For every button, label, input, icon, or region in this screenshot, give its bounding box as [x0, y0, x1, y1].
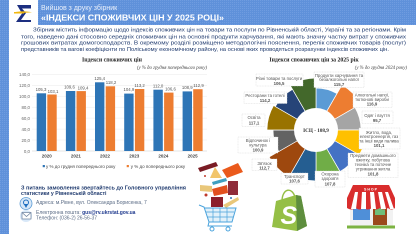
label: recreation: Відпочинок і [246, 138, 270, 143]
address: Адреса: м.Рівне, вул. Олександра Борисенка, 7 [36, 200, 147, 206]
label: communication: Зв'язок [257, 161, 272, 166]
label: education: Освіта [247, 115, 261, 120]
bar value labels: 113,2 [134, 83, 145, 88]
icon: green shopping bag [272, 190, 307, 231]
label: household: техніка та поточне [355, 162, 392, 167]
year labels: 2025 [188, 154, 198, 158]
contact block [20, 184, 186, 222]
bar chart subtitle: (у % до грудня попереднього року) [137, 66, 207, 71]
left stripe [0, 0, 9, 234]
phone: Телефон: (036-2) 26-56-37 [36, 216, 97, 222]
label: restaurants: 114,2 [260, 98, 271, 103]
label: alcohol [353, 92, 392, 108]
label: transport [281, 173, 308, 184]
year labels [42, 154, 198, 158]
intro text: Збірник містить інформацію щодо індексів споживчих цін на товари та послуги по Рівненській області, Україні та за регіонами. Крім [33, 26, 406, 34]
label: alcohol: тютюнові вироби [355, 97, 389, 102]
label: household [348, 153, 398, 178]
icon: shop storefront: SHOP [364, 188, 378, 192]
y axis labels: 20,0 [21, 138, 31, 143]
bar value labels: 125,4 [94, 76, 106, 81]
label: other goods: Різні товари та послуги [256, 76, 303, 81]
y axis labels: 120,0 [19, 83, 31, 88]
header band [38, 0, 416, 25]
bar value labels: 108,9 [182, 85, 193, 90]
rose center label: ІСЦ - 108,9 [303, 128, 329, 134]
label: food [314, 72, 364, 88]
contact heading [21, 184, 186, 197]
bar value labels: 106,6 [165, 86, 176, 92]
label: communication: 112,7 [259, 166, 270, 170]
bar value labels: 109,6 [64, 84, 75, 90]
year labels: 2022 [100, 154, 111, 158]
intro text [21, 26, 406, 53]
label: communication [252, 159, 277, 170]
year labels: 2024 [158, 154, 169, 158]
bar value labels: 118,2 [106, 80, 117, 85]
bar chart legend: у % до попереднього року [131, 164, 186, 169]
rose slices [267, 78, 366, 181]
y axis labels: 140,0 [19, 72, 31, 77]
bar chart title: Індекси споживчих цін [82, 58, 143, 64]
bar value labels: 104,9 [124, 87, 135, 92]
label: recreation [238, 137, 278, 153]
intro text: того, наведено дані стосовно середніх споживчих цін на основні продукти харчування, які мають значну частку витрат у споживчих [21, 34, 406, 40]
year labels: 2020 [42, 154, 52, 158]
bars series: previous year [47, 86, 203, 151]
label: clothing: 95,7 [373, 118, 382, 123]
label: alcohol: 116,9 [367, 102, 378, 106]
contact heading: З питань замовлення звертайтесь до Головного управління [21, 184, 186, 192]
intro text: грошових витратах домогосподарств. В окремому розділі розміщено методологічні пояснення, перелік споживчих товарів (послуг) [21, 40, 406, 46]
icon: mail [20, 210, 32, 222]
bar chart legend [43, 164, 186, 169]
rose chart: indices by group 2025 [238, 58, 407, 187]
label: other goods [256, 74, 303, 86]
label: other goods: 106,5 [274, 81, 285, 86]
label: transport: Транспорт [284, 174, 305, 179]
y axis labels: 60,0 [21, 116, 31, 121]
label: alcohol: Алкогольні напої, [355, 92, 389, 98]
label: recreation: 100,9 [253, 148, 264, 152]
bar chart legend: у % до грудня попереднього року [46, 164, 116, 169]
label: housing: та інші види палива [359, 138, 399, 144]
label: housing [359, 128, 400, 149]
label: food: Продукти харчування та [315, 73, 364, 78]
label: health: здоров'я [322, 176, 339, 181]
bar value labels: 112,9 [193, 83, 204, 88]
rose chart subtitle: (у % до грудня 2024 року) [355, 66, 407, 71]
label: transport: 107,6 [289, 178, 300, 184]
y axis labels: 0,0 [24, 149, 31, 154]
label: household: вжитку, побутова [356, 158, 390, 162]
label: health: Охорона [321, 172, 339, 176]
bar value labels: 112,0 [153, 84, 164, 88]
label: food: безалкогольні напої [319, 77, 360, 82]
y axis labels: 100,0 [19, 94, 31, 99]
y axis labels: 80,0 [21, 105, 31, 110]
label: household: 101,8 [368, 172, 379, 176]
label: education: 117,1 [249, 120, 260, 126]
label: clothing: Одяг і взуття [364, 113, 390, 118]
label: household: Предмети домашнього [350, 153, 396, 158]
label: education [242, 114, 265, 126]
bar value labels [36, 76, 204, 94]
intro text: представників та вагові коефіцієнти по Поліському економічному району, на основі яких проводяться розрахунки індексів споживчих цін. [21, 46, 389, 53]
bar value labels: 105,3 [36, 87, 47, 92]
header title: «ІНДЕКСИ СПОЖИВЧИХ ЦІН У 2025 РОЦІ» [41, 14, 225, 22]
label: clothing [362, 111, 393, 124]
bar chart: consumer price indices [19, 58, 207, 169]
y axis labels: 40,0 [21, 127, 31, 132]
icon: green shopping bag: S [280, 202, 298, 230]
label: housing: електроенергія, газ [360, 134, 398, 139]
email: Електронна пошта: gus@rv.ukrstat.gov.ua [36, 210, 136, 216]
rose center label [294, 108, 338, 152]
label: restaurants: Ресторани та готелі [245, 93, 285, 98]
rose chart title: Індекси споживчих цін за 2025 рік [269, 58, 359, 64]
header subtitle: Вийшов з друку збірник [41, 4, 118, 12]
bar value labels: 109,4 [78, 86, 89, 90]
icon: sigma logo [14, 5, 32, 22]
year labels: 2021 [71, 154, 81, 158]
label: health [315, 171, 345, 187]
label: recreation: культура [249, 142, 267, 148]
label: food: 115,7 [334, 82, 345, 87]
label: household: утримання житла [356, 166, 391, 172]
year labels: 2023 [129, 154, 140, 158]
label: health: 107,8 [325, 182, 336, 186]
icon: shop storefront [347, 185, 395, 228]
label: housing: 101,1 [374, 143, 385, 148]
label: restaurants [244, 92, 287, 104]
bars series: December to December [37, 82, 192, 151]
contact heading: статистики у Рівненській області [21, 190, 107, 197]
icon: shopping cart with goods [198, 162, 243, 231]
y axis labels [19, 72, 31, 154]
bar value labels: 103,1 [48, 89, 59, 94]
label: housing: Житло, вода, [366, 130, 392, 135]
icon: location pin [20, 198, 32, 210]
